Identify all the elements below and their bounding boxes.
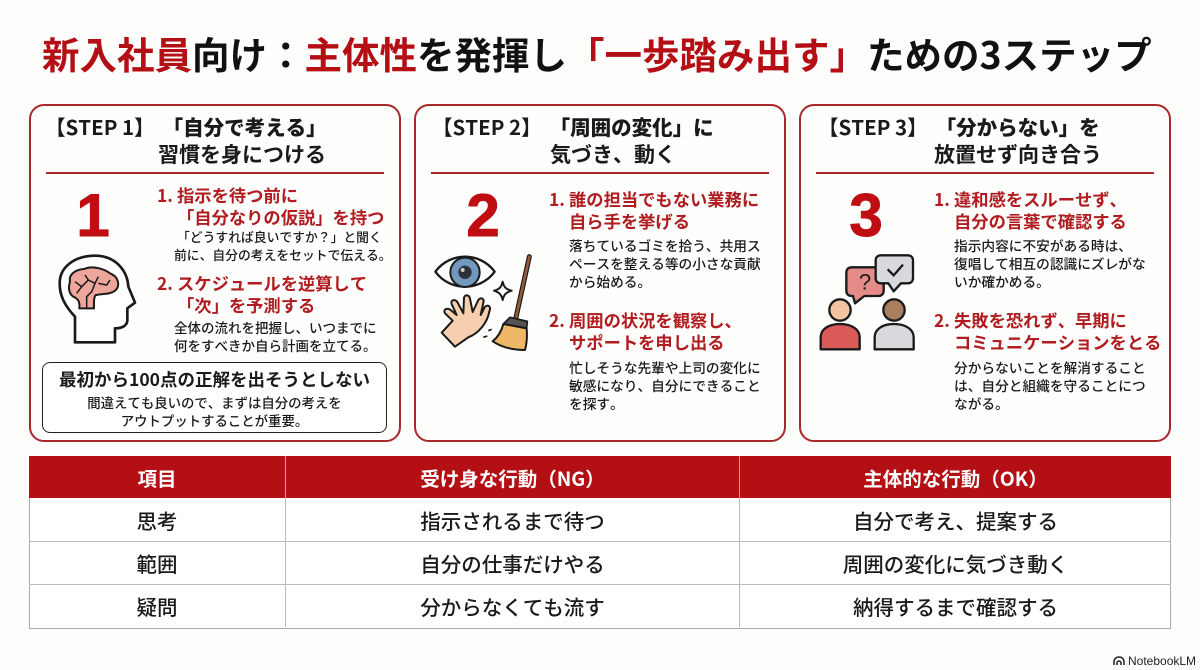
subpoint 2	[157, 270, 367, 317]
subpoint 2: サポートを申し出る	[569, 328, 725, 354]
icon: two people with speech bubbles: ?	[859, 269, 871, 294]
icon: two people with speech bubbles	[820, 254, 915, 350]
step number 1: 1	[76, 182, 110, 249]
subpoint 2 text: 敏感になり、自分にできること	[569, 375, 761, 395]
subpoint 2 text: は、自分と組織を守ることにつ	[954, 375, 1146, 395]
panel: step 1	[29, 104, 401, 442]
subpoint 1: 自分の言葉で確認する	[954, 208, 1127, 232]
subpoint 1 text: いか確かめる。	[954, 271, 1050, 291]
subpoint 1 text: から始める。	[569, 271, 651, 291]
subpoint 1 text: 指示内容に不安がある時は、	[954, 235, 1132, 255]
subpoint 1	[157, 182, 384, 229]
row: questions: 納得するまで確認する	[853, 591, 1058, 621]
subpoint 2 text: ながる。	[954, 393, 1009, 413]
subpoint 2 text: 何をすべきか自ら計画を立てる。	[174, 335, 376, 355]
panel: step 2	[414, 104, 786, 442]
subpoint 2	[934, 307, 1161, 354]
comparison table	[29, 456, 1171, 629]
subpoint 2: 失敗を恐れず、早期に	[954, 307, 1127, 332]
subpoint 1: 誰の担当でもない業務に	[569, 186, 759, 211]
icon: brain head	[58, 254, 136, 344]
heading: step 1	[45, 111, 327, 169]
heading: step 3	[818, 111, 1102, 169]
step number 2: 2	[466, 182, 500, 249]
panel: step 3	[799, 104, 1171, 442]
subpoint 2 text: 全体の流れを把握し、いつまでに	[174, 317, 376, 337]
callout: 最初から100点の正解を出そうとしない	[59, 367, 370, 392]
row: scope: 周囲の変化に気づき動く	[843, 548, 1068, 578]
subpoint 1 text	[569, 235, 761, 291]
callout	[42, 362, 387, 433]
row: scope: 範囲	[136, 548, 178, 578]
callout: アウトプットすることが重要。	[121, 410, 308, 430]
watermark: NotebookLM: NotebookLM	[1128, 654, 1196, 668]
table header: 項目	[137, 462, 176, 492]
row: thinking: 自分で考え、提案する	[853, 504, 1058, 534]
subpoint 2	[549, 307, 742, 354]
subpoint 1: 1.	[157, 182, 173, 207]
subpoint 2: 2.	[934, 307, 950, 332]
subpoint 1: 指示を待つ前に	[177, 182, 298, 207]
subpoint 2: スケジュールを逆算して	[177, 270, 367, 295]
subpoint 2 text: 分からないことを解消すること	[954, 357, 1146, 377]
subpoint 1 text: 落ちているゴミを拾う、共用ス	[569, 235, 761, 255]
subpoint 1: 違和感をスルーせず、	[954, 186, 1127, 211]
subpoint 2 text: を探す。	[569, 393, 624, 413]
heading: step 1: 【STEP 1】 「自分で考える」	[45, 111, 327, 141]
subpoint 2 text: 忙しそうな先輩や上司の変化に	[569, 357, 761, 377]
title: 新入社員向け：主体性を発揮し「一歩踏み出す」ための3ステップ	[42, 25, 1152, 80]
row: thinking	[136, 498, 1058, 541]
row: questions: 分からなくても流す	[420, 591, 605, 621]
row: thinking: 指示されるまで待つ	[420, 504, 605, 534]
subpoint 2 text	[569, 357, 761, 413]
subpoint 1: 「自分なりの仮説」を持つ	[177, 204, 384, 229]
row: scope: 自分の仕事だけやる	[420, 548, 605, 578]
heading: step 2: 気づき、動く	[550, 139, 676, 169]
subpoint 1 text	[954, 235, 1146, 291]
row: questions: 疑問	[136, 591, 178, 621]
subpoint 2: コミュニケーションをとる	[954, 328, 1161, 354]
subpoint 2: 周囲の状況を観察し、	[569, 307, 742, 332]
table header: 主体的な行動（OK）	[863, 462, 1048, 492]
subpoint 2: 2.	[549, 307, 565, 332]
subpoint 1: 1.	[549, 186, 565, 211]
row: scope	[29, 541, 1171, 584]
table header: 受け身な行動（NG）	[420, 462, 605, 492]
icon: eye, hand and broom	[434, 254, 532, 351]
heading: step 2	[432, 111, 714, 169]
row: questions	[29, 584, 1171, 628]
heading: step 3: 【STEP 3】 「分からない」を	[818, 111, 1100, 141]
subpoint 1: 1.	[934, 186, 950, 211]
heading: step 1: 習慣を身につける	[158, 139, 326, 169]
subpoint 1 text: 前に、自分の考えをセットで伝える。	[174, 245, 392, 264]
subpoint 2 text	[174, 317, 376, 355]
subpoint 1: 自ら手を挙げる	[569, 208, 690, 232]
subpoint 1 text: 復唱して相互の認識にズレがな	[954, 253, 1146, 273]
subpoint 2: 2.	[157, 270, 173, 295]
callout: 間違えても良いので、まずは自分の考えを	[87, 392, 342, 412]
subpoint 1 text: ペースを整える等の小さな貢献	[569, 253, 761, 273]
subpoint 2: 「次」を予測する	[177, 292, 315, 317]
subpoint 1 text: 「どうすれば良いですか？」と聞く	[177, 227, 382, 246]
heading: step 3: 放置せず向き合う	[934, 139, 1102, 169]
row: thinking: 思考	[136, 504, 178, 534]
table header	[29, 456, 1171, 498]
subpoint 1	[549, 186, 759, 232]
subpoint 2 text	[954, 357, 1146, 413]
subpoint 1	[934, 186, 1127, 232]
heading: step 2: 【STEP 2】 「周囲の変化」に	[432, 111, 714, 141]
subpoint 1 text	[174, 227, 392, 264]
step number 3: 3	[849, 182, 883, 249]
